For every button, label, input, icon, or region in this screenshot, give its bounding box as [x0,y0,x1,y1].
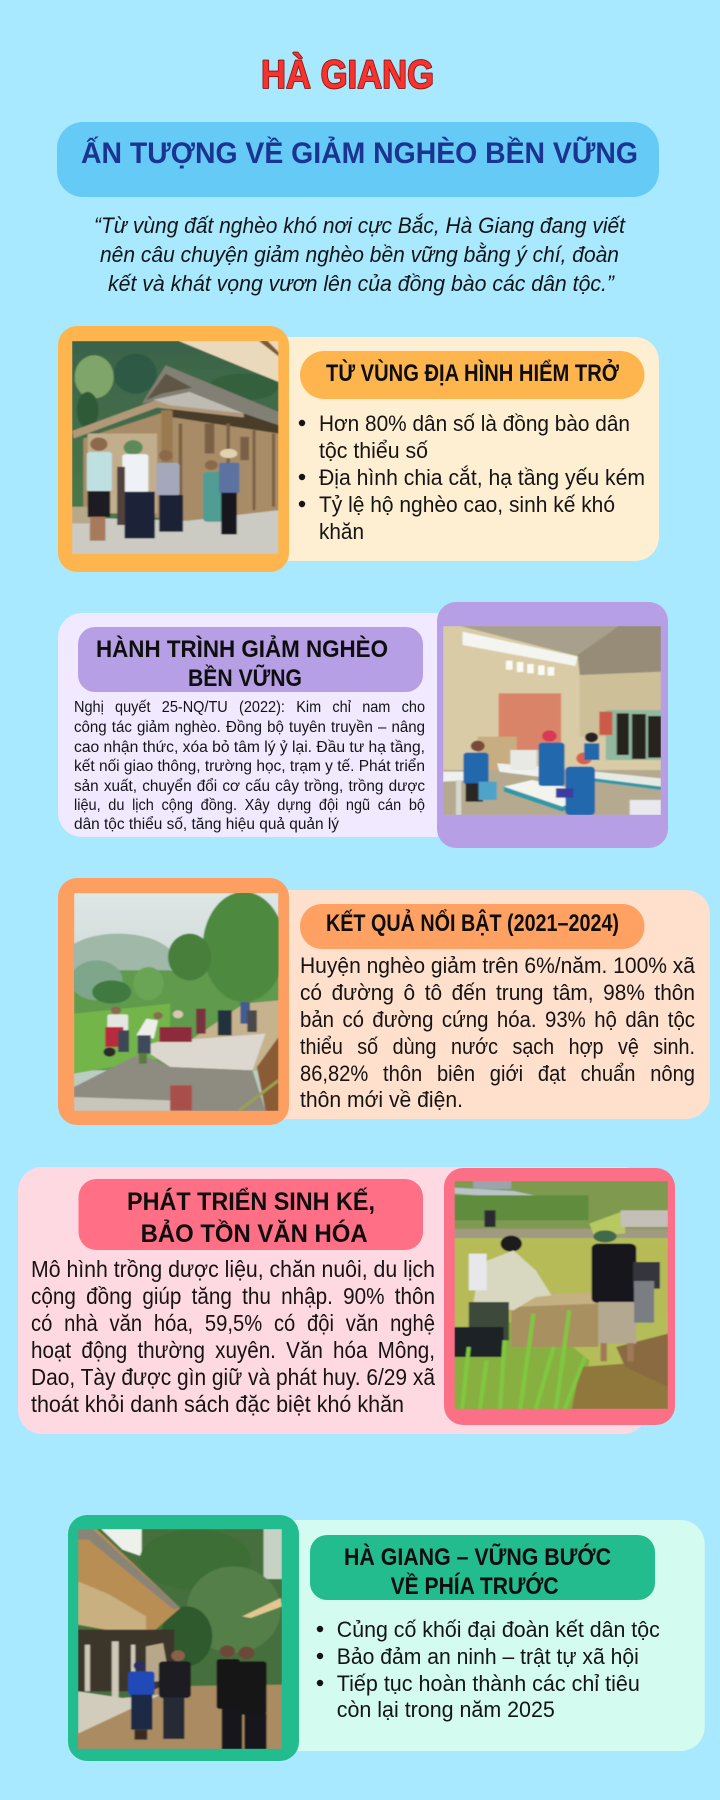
body text [74,699,425,833]
body text: 86,82% thôn biên giới đạt chuẩn nông [300,1061,695,1086]
panel heading: HÀ GIANG – VỮNG BƯỚC [344,1543,611,1571]
panel heading: PHÁT TRIỂN SINH KẾ, [127,1187,375,1216]
title: Hà Giang: HÀ GIANG [261,52,434,97]
panel: steady steps forward [68,1515,705,1761]
panel heading: VỀ PHÍA TRƯỚC [391,1572,559,1600]
panel background [250,1520,705,1751]
panel: terrain [58,326,659,572]
body text [300,953,696,1112]
heading banner [57,122,659,197]
bullet list: Địa hình chia cắt, hạ tầng yếu kém [319,465,645,490]
body text: kết nối giao thông, trường học, trạm y tế. Phát triển [74,757,425,775]
panel heading: BỀN VỮNG [188,664,302,692]
body text: thôn mới về điện. [300,1087,463,1112]
photo: road building [74,893,278,1111]
panel: livelihoods and culture [18,1167,675,1434]
photo frame [68,1515,299,1761]
intro quote: nên câu chuyện giảm nghèo bền vững bằng ý chí, đoàn [100,242,619,267]
body text: Dao, Tày được gìn giữ và phát huy. 6/29 xã [31,1364,435,1390]
bullet list: tộc thiểu số [319,438,428,463]
bullet list: còn lại trong năm 2025 [337,1697,555,1722]
body text: có nhà văn hóa, 59,5% có đội văn nghệ [31,1310,435,1336]
photo: rice harvest [454,1181,668,1409]
panel heading [310,1535,655,1600]
panel background [58,613,458,837]
photo: sewing workshop [443,626,661,815]
body text: sản xuất, chuyển đổi cơ cấu cây trồng, trồng dược [74,777,425,795]
panel heading [78,1179,423,1250]
photo frame [58,326,289,572]
body text: có đường ô tô đến trung tâm, 98% thôn [300,980,695,1005]
panel heading pill [300,904,644,949]
bullet list: Tỷ lệ hộ nghèo cao, sinh kế khó [319,492,615,517]
bullet list: Bảo đảm an ninh – trật tự xã hội [337,1644,639,1669]
body text: công tác giảm nghèo. Đồng bộ tuyên truyền – nâng [74,719,425,736]
body text: hoạt động thường xuyên. Văn hóa Mông, [31,1337,435,1363]
intro quote [94,213,626,296]
body text: cộng đồng giúp tăng thu nhập. 90% thôn [31,1283,435,1309]
body text: cao nhận thức, xóa bỏ tâm lý ỷ lại. Đầu tư hạ tầng, [74,739,425,756]
bullet list: Củng cố khối đại đoàn kết dân tộc [337,1617,660,1642]
panel background [18,1167,647,1434]
body text: bản có đường cứng hóa. 93% hộ dân tộc [300,1007,695,1032]
bullet list: Tiếp tục hoàn thành các chỉ tiêu [337,1671,640,1696]
photo frame [444,1168,675,1425]
panel heading: HÀNH TRÌNH GIẢM NGHÈO [96,634,388,663]
photo: stilt house with villagers [78,1529,282,1749]
body text: liệu, du lịch cộng đồng. Xây dựng đội ngũ cán bộ [74,797,425,814]
photo: wooden house with officials [72,341,278,554]
intro quote: kết và khát vọng vươn lên của đồng bào các dân tộc.” [108,271,616,296]
body text: dân tộc thiểu số, tăng hiệu quả quản lý [74,815,339,833]
body text: Nghị quyết 25-NQ/TU (2022): Kim chỉ nam cho [74,699,425,716]
bullet list: Hơn 80% dân số là đồng bào dân [319,411,630,436]
panel: outstanding results [58,878,710,1125]
bullet list: khăn [319,519,364,544]
body text: thoát khỏi danh sách đặc biệt khó khăn [31,1391,404,1417]
body text [31,1256,435,1417]
intro quote: “Từ vùng đất nghèo khó nơi cực Bắc, Hà Giang đang viết [94,213,626,238]
photo frame [58,878,289,1125]
panel heading pill [300,351,644,399]
panel background [240,890,710,1119]
bullet list [299,411,645,544]
heading text: ẤN TƯỢNG VỀ GIẢM NGHÈO BỀN VỮNG [81,136,638,170]
panel background [240,337,659,561]
photo frame [437,602,668,848]
panel heading: BẢO TỒN VĂN HÓA [141,1218,368,1248]
panel heading [78,627,423,692]
body text: Mô hình trồng dược liệu, chăn nuôi, du lịch [31,1256,435,1282]
body text: Huyện nghèo giảm trên 6%/năm. 100% xã [300,953,696,978]
panel heading pill: KẾT QUẢ NỔI BẬT (2021–2024) [326,908,619,937]
panel: poverty reduction journey [58,602,668,848]
bullet list [317,1617,660,1722]
panel heading pill: TỪ VÙNG ĐỊA HÌNH HIỂM TRỞ [326,358,619,387]
